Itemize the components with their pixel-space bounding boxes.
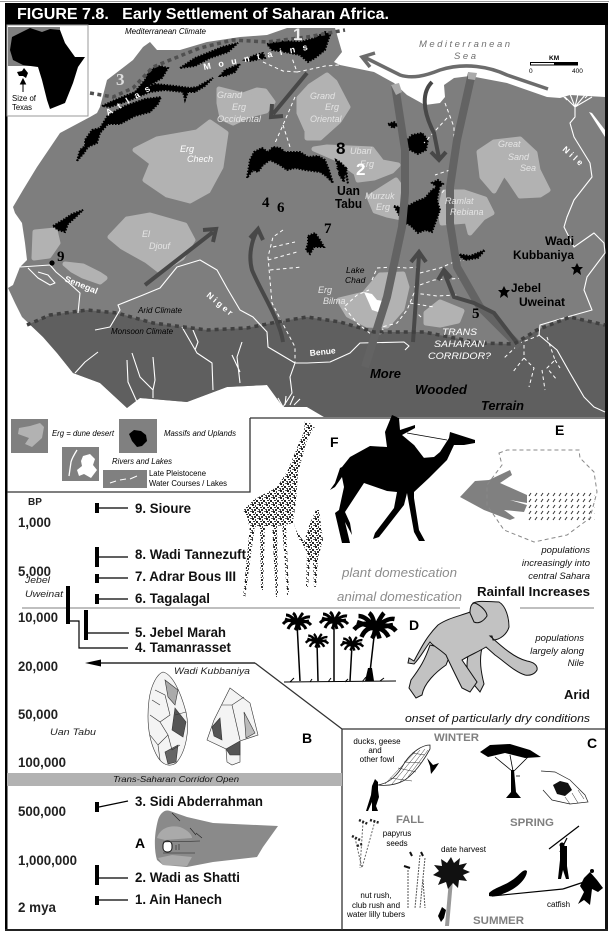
timeline: site 4 Tamanrasset <box>70 621 231 655</box>
text: populations along Nile: largely along <box>530 646 585 657</box>
map labels: Arid Climate <box>137 305 182 315</box>
inset: Africa locator <box>7 25 88 116</box>
map labels: 8 <box>336 139 345 158</box>
timeline: site 2 Wadi as Shatti: 2. Wadi as Shatti <box>135 870 240 885</box>
corridor band: Trans-Saharan Corridor Open <box>113 774 239 784</box>
timeline: site 3 Sidi Abderrahman: 3. Sidi Abderrahman <box>135 794 263 809</box>
map labels: Tabu <box>335 197 362 211</box>
timeline: BP scale: 1,000 <box>18 515 51 530</box>
scale bar: KM <box>549 55 559 62</box>
legend swatch: water courses <box>103 470 147 488</box>
timeline: BP scale: 1,000,000 <box>18 853 77 868</box>
timeline: site 5 Jebel Marah <box>84 610 226 640</box>
map labels: Uan <box>337 184 360 198</box>
map labels: Murzuk <box>365 191 395 201</box>
map labels: Sea <box>520 163 536 173</box>
illustration: catfish and angler <box>489 869 603 905</box>
panel F label: F <box>330 434 339 450</box>
inset: Africa locator: Texas <box>12 103 32 112</box>
text: populations along Nile: populations <box>534 633 584 644</box>
map labels: 5 <box>472 306 480 322</box>
panel C label: C <box>587 735 597 751</box>
map labels: Lake <box>346 265 365 275</box>
map labels: 4 <box>262 195 270 211</box>
illustration: date palm with climber <box>433 857 470 926</box>
map labels: Oriental <box>310 114 343 124</box>
map labels: Erg <box>318 285 332 295</box>
arid-monsoon climate boundary <box>27 310 605 344</box>
corridor band <box>7 773 342 786</box>
illustration: acacia tree <box>480 744 541 798</box>
map labels: Monsoon Climate <box>111 326 173 336</box>
illustration: hand gripping stone <box>155 810 278 867</box>
map labels: Uweinat <box>519 295 565 309</box>
panel B label: B <box>302 730 312 746</box>
illustration: rushes and lilies <box>404 852 425 908</box>
timeline: site 1 Ain Hanech: 1. Ain Hanech <box>135 892 222 907</box>
illustration: papyrus plants <box>352 820 380 868</box>
text: populations into central Sahara <box>522 545 590 582</box>
scale bar <box>529 55 583 75</box>
text: nut rush: water lilly tubers <box>346 910 405 919</box>
map labels: Erg <box>180 144 194 154</box>
map labels: Mediterranean <box>419 39 510 50</box>
map labels: Grand <box>310 91 336 101</box>
map labels: 7 <box>324 221 332 237</box>
timeline: site 9 Sioure <box>95 501 191 516</box>
scale bar: 0 <box>529 68 533 75</box>
illustration: camel and rider <box>330 415 475 543</box>
map labels: CORRIDOR? <box>428 351 492 362</box>
map labels: A t l a s <box>104 83 152 118</box>
map labels: SAHARAN <box>434 339 485 350</box>
text: catfish: catfish <box>547 900 570 909</box>
migration arrows <box>145 73 517 343</box>
map labels: Benue <box>309 345 336 358</box>
text: populations into central Sahara: increasingly into <box>522 558 590 569</box>
timeline: BP scale: 2 mya <box>18 900 56 915</box>
timeline: site 8 Wadi Tannezuft: 8. Wadi Tannezuft <box>135 547 246 562</box>
text: animal domestication: animal domestication <box>337 590 462 604</box>
timeline: Jebel Uweinat: Uweinat <box>25 589 63 600</box>
ancient water courses <box>263 58 560 390</box>
map labels: Senegal <box>63 274 99 296</box>
map labels: TRANS <box>442 327 478 338</box>
panel: map legend <box>11 419 236 488</box>
timeline: BP scale: 500,000 <box>18 804 66 819</box>
timeline: BP scale: 50,000 <box>18 707 58 722</box>
timeline: Jebel Uweinat <box>24 575 70 624</box>
text: populations into central Sahara: populations <box>540 545 590 556</box>
map labels: El <box>142 229 151 239</box>
map labels: Chech <box>187 154 213 164</box>
text: ducks geese fowl: ducks, geese <box>353 737 401 746</box>
map labels: Mediterranean Climate <box>125 26 206 36</box>
timeline label: Uan Tabu: Uan Tabu <box>50 727 97 738</box>
legend text: water courses: Water Courses / Lakes <box>149 479 227 488</box>
heading: Arid: Arid <box>564 687 590 702</box>
map labels: 9 <box>57 249 64 265</box>
text: papyrus seeds <box>383 829 411 848</box>
panel E label: E <box>555 422 564 438</box>
text: onset of dry conditions: onset of particularly dry conditions <box>405 713 591 725</box>
map labels: Occidental <box>217 114 262 124</box>
illustration: palm grove <box>283 612 396 682</box>
text: ducks geese fowl: other fowl <box>360 755 395 764</box>
illustration: elephant <box>408 601 537 698</box>
trans-Saharan corridors <box>365 72 520 367</box>
timeline: BP scale: 5,000 <box>18 564 51 579</box>
legend text: massifs: Massifs and Uplands <box>164 429 236 438</box>
climate boundary line <box>22 607 594 609</box>
timeline: site 2 Wadi as Shatti <box>95 865 240 885</box>
sand seas <box>34 75 548 326</box>
timeline label: Wadi Kubbaniya: Wadi Kubbaniya <box>174 666 250 677</box>
timeline: BP scale: 20,000 <box>18 659 58 674</box>
illustration: leaf-shaped biface <box>148 672 188 765</box>
map labels: Erg <box>360 159 374 169</box>
map labels <box>57 25 585 413</box>
panel: map of Saharan Africa <box>0 25 605 420</box>
timeline: site 3 Sidi Abderrahman <box>95 794 263 812</box>
map labels: Djouf <box>149 241 172 251</box>
map labels: Ramlat <box>445 196 474 206</box>
legend swatch: erg <box>11 419 48 453</box>
text: plant domestication: plant domestication <box>341 566 457 580</box>
season: spring: SPRING <box>510 817 554 829</box>
Mediterranean climate boundary <box>90 30 345 97</box>
rivers and lakes <box>20 93 605 412</box>
timeline: site 9 Sioure: 9. Sioure <box>135 501 191 516</box>
map labels: Erg <box>325 102 339 112</box>
timeline: BP scale: 100,000 <box>18 755 66 770</box>
panel D label: D <box>409 617 419 633</box>
timeline: site 5 Jebel Marah: 5. Jebel Marah <box>135 625 226 640</box>
map labels: Erg <box>232 102 246 112</box>
map labels: 1 <box>293 25 302 44</box>
season: summer: SUMMER <box>473 915 524 927</box>
text: ducks geese fowl: and <box>368 746 382 755</box>
massifs and uplands <box>53 32 485 260</box>
Mediterranean arrow <box>362 53 548 89</box>
map labels: More <box>370 366 401 381</box>
text: populations along Nile: Nile <box>568 658 584 669</box>
illustration: tanged point <box>207 688 258 765</box>
scale bar: 400 <box>572 68 583 75</box>
text: populations into central Sahara: central Sahara <box>528 571 590 582</box>
map labels: 2 <box>356 160 365 179</box>
legend swatch: rivers and lakes <box>62 447 99 481</box>
map labels: Rebiana <box>450 207 484 217</box>
season: fall: FALL <box>396 814 424 826</box>
map labels: Ubari <box>350 146 373 156</box>
map labels: 3 <box>116 70 124 89</box>
timeline: BP scale <box>18 497 77 915</box>
map labels: Great <box>498 139 521 149</box>
map labels: Wadi <box>545 234 574 248</box>
timeline: site 1 Ain Hanech <box>95 892 222 907</box>
site stars <box>336 164 583 298</box>
illustration: hand holding nuts <box>541 771 588 804</box>
map labels: Jebel <box>511 281 541 295</box>
map labels: Bilma <box>323 296 346 306</box>
timeline: Jebel Uweinat: Jebel <box>24 575 51 586</box>
text: populations along Nile <box>530 633 585 669</box>
timeline: BP scale: 10,000 <box>18 610 58 625</box>
map labels: Sand <box>508 152 530 162</box>
map labels: Nile <box>561 144 585 168</box>
map labels: Grand <box>217 90 243 100</box>
text: nut rush: club rush and <box>352 901 400 910</box>
legend text: water courses: Late Pleistocene <box>149 469 207 478</box>
map labels: Terrain <box>481 398 524 413</box>
arrow: open-ended timeline pointer <box>85 660 255 666</box>
timeline: site 8 Wadi Tannezuft <box>95 547 246 567</box>
monsoon zone <box>0 310 605 420</box>
timeline: site 7 Adrar Bous III: 7. Adrar Bous III <box>135 569 236 584</box>
season: winter: WINTER <box>434 732 479 744</box>
title: FIGURE 7.8. Early Settlement of Saharan Africa. <box>17 6 389 23</box>
timeline: site 4 Tamanrasset: 4. Tamanrasset <box>135 640 231 655</box>
map labels: M o u n t a i n s <box>202 42 308 72</box>
map labels: 6 <box>277 200 285 216</box>
legend text: water courses <box>149 469 227 488</box>
text: nut rush <box>346 891 405 919</box>
site 9 dot <box>49 260 55 266</box>
panel borders <box>7 418 605 930</box>
map labels: Chad <box>345 275 366 285</box>
inset: Africa locator: Size of <box>12 94 37 103</box>
panel C: seasonal round <box>346 732 603 927</box>
map labels: Sea <box>454 51 476 62</box>
text: papyrus seeds: seeds <box>386 839 408 848</box>
heading: Rainfall Increases: Rainfall Increases <box>477 584 590 599</box>
text: papyrus seeds: papyrus <box>383 829 411 838</box>
illustration: spear fisher <box>549 826 579 879</box>
text: date harvest: date harvest <box>441 845 487 854</box>
text: nut rush: nut rush, <box>360 891 392 900</box>
map land <box>8 28 605 417</box>
map labels: Erg <box>376 202 390 212</box>
illustration: giraffes <box>243 420 323 598</box>
legend swatch: massifs <box>119 419 157 453</box>
timeline: BP scale: BP <box>28 497 42 508</box>
timeline: site 6 Tagalagal: 6. Tagalagal <box>135 591 210 606</box>
map labels: N i g e r <box>205 290 235 318</box>
legend text: erg: Erg = dune desert <box>52 429 115 438</box>
illustration: fowler with net <box>366 745 439 811</box>
map labels: Kubbaniya <box>513 248 574 262</box>
panel A label: A <box>135 835 145 851</box>
lake Chad <box>364 292 388 312</box>
text: ducks geese fowl <box>353 737 401 764</box>
map labels: Wooded <box>415 382 468 397</box>
timeline: site 6 Tagalagal <box>95 591 210 606</box>
legend text: rivers and lakes: Rivers and Lakes <box>112 457 172 466</box>
illustration: hand pointing into Africa outline <box>460 450 597 542</box>
